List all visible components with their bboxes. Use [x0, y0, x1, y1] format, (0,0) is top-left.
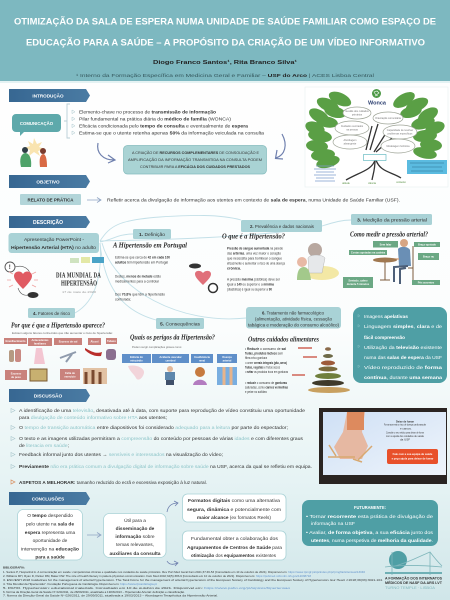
heading: Introdução: INTRODUÇÃO [32, 92, 64, 98]
risk labels: Envelhecimento [6, 339, 26, 343]
title: OTIMIZAÇÃO DA SALA DE ESPERA NUMA UNIDADE DE SAÚDE FAMILIAR COMO ESPAÇO DE [14, 16, 436, 26]
consequence labels: renal [199, 358, 205, 362]
bibliography: 7. Norma da Direção-Geral da Saúde Nº 026/2011, de 29/09/2011, atualizada a 19/03/2013 – Abordagem Terapêutica da Hipertensão Arterial. [3, 594, 218, 598]
section 5 subtitle: Podem surgir complicações graves como: [132, 345, 182, 349]
callout: complementary resources: AMPLIFICAÇÃO DA INFORMAÇÃO TRANSMITIDA NA CONSULTA PODEM [128, 157, 262, 162]
bibliography: 4. "Dia Mundial da Hipertensão". Fundação Portuguesa de Cardiologia. Disponível em: https://www.fpcardiologia.pt [3, 583, 157, 586]
box: dissemination: Útil para a [124, 517, 146, 524]
header band [0, 0, 450, 83]
box: waiting time conclusion: intervenção na educação [21, 546, 79, 552]
box: 6. Tratamento não farmacológico: (alimentação, atividade física, cessação [255, 316, 332, 322]
section 4 subtitle: Existem alguns fatores conhecidos que irão aumentar o risco de hipertensão: [12, 331, 113, 335]
panel: future work: FUTURAMENTE: [354, 505, 387, 510]
panel: video features [353, 307, 447, 383]
icon: WONCA logo: Wonca [368, 100, 386, 106]
box: collaboration: Agrupamentos de Centros de Saúde para [187, 545, 282, 551]
heading: Introdução [9, 89, 90, 102]
television: message text [384, 420, 426, 442]
mind-map connectors [75, 215, 351, 320]
tree ellipses [333, 107, 417, 153]
tree ellipses: abrangente [344, 142, 357, 146]
tree root labels [342, 181, 406, 185]
introduction bullet list: Pilar fundamental na prática diária do médico de família (WONCA) [79, 116, 232, 122]
box: collaboration: otimização dos equipamentos existentes [191, 553, 277, 559]
arrow: curved down [167, 561, 178, 566]
objective text: Refletir acerca da divulgação de informação aos utentes em contexto de sala de espera , numa Unidade de Saúde Familiar (USF). [107, 198, 400, 202]
callout: complementary resources: A CRIAÇÃO DE RECURSOS COMPLEMENTARES DE CONSOLIDAÇÃO E [132, 150, 260, 155]
figure: food pyramid [308, 347, 350, 393]
box: 3. Medição [351, 214, 432, 225]
heading: dangers of hypertension: Quais os perigos da Hipertensão? [130, 334, 215, 342]
risk labels: de peso [11, 375, 21, 379]
arrow: curved right [276, 134, 285, 159]
risk labels: familiares [34, 342, 47, 346]
tree root labels: atitude [342, 182, 350, 185]
risk labels: Falta de [65, 371, 75, 375]
panel: video features: numa das salas de espera da USF [364, 355, 442, 361]
box: dissemination [104, 514, 166, 558]
logo: internato bridge: A FORMAÇÃO DOS INTERNATOS [385, 576, 443, 580]
section 4 content [4, 322, 117, 384]
bibliography: 3. ESC/ESH 2018 Guidelines for the management of arterial hypertension. The Task Force for the management of arterial hypertension of the European Society of Cardiology and the European Society of Hypertension. Eur Heart J 2018;39(33):3021-104. [3, 579, 383, 582]
box: 3. Medição: 3. Medição da pressão arterial [357, 218, 427, 224]
bibliography: BIBLIOGRAFIA: [3, 566, 25, 570]
section 6 text: e peixe no sal/óleo [245, 390, 267, 394]
box: waiting time conclusion [18, 510, 82, 560]
section 6 text: fibra e/ou gordura [245, 356, 267, 360]
heading: how to measure: Como medir a pressão arterial? [350, 230, 428, 238]
label: relato de prática [20, 194, 81, 205]
television: message text: com a ajuda dos cuidados de saúde [386, 434, 424, 438]
discussion bullet list: O texto e as imagens utilizadas permitiram a compreensão do conteúdo por pessoas de várias idades e com diferentes graus [19, 436, 304, 441]
panel: video features: Vídeo reproduzido de forma [364, 365, 442, 371]
box: waiting time conclusion: oportunidade de [33, 538, 68, 544]
box: digital formats [182, 494, 286, 522]
section 6 text: frutas, produtos lácteos sem [245, 352, 283, 356]
tree ellipses: Abordagem [344, 139, 356, 142]
box: dissemination: disseminação de [116, 526, 155, 532]
box: collaboration [182, 531, 286, 560]
icon: heart and monitor [189, 264, 218, 292]
heading: what is hypertension: O que é a Hipertensão? [222, 232, 285, 240]
bibliography: 2. Williams MH, Ryan D, Parker RM, Baker DW. The role of health literacy in patient-physician communication. Fam Med 2002;34(5):383-9 [Consultado em 10 de outubro de 2021]. Disponível em: https://pubmed.ncbi.nlm.nih.gov/12038718 [3, 575, 312, 578]
panel: video features: contínua , durante uma semana [364, 375, 442, 381]
risk labels: Excesso de sal [59, 340, 78, 344]
tree ellipses: Cuidados centrados [341, 125, 364, 128]
tree ellipses: Orientação comunitária [375, 117, 402, 120]
section 6 text: frutas, vegetais e frutos secos [245, 366, 280, 370]
consequence icons [128, 365, 237, 385]
heading: Descrição: DESCRIÇÃO [33, 219, 63, 226]
section 6 text: • comer cereais integrais (pão, arroz) [245, 361, 287, 365]
panel: future work: • Avaliar, de forma objetiva , a sua eficácia junto dos [306, 530, 434, 535]
arrow: curved left [98, 143, 115, 163]
logo: internato bridge [385, 551, 443, 590]
heading: world hypertension day: DIA MUNDIAL DA [56, 272, 101, 280]
panel: video features: fácil compreensão [364, 335, 405, 341]
section 6 content [245, 336, 350, 394]
measurement labels: Sem falar [380, 242, 391, 246]
tree trunk and roots [346, 124, 401, 180]
discussion bullet list: para divulgação de conteúdo informativo sobre HTA aos utentes; [19, 415, 167, 420]
box: 2. Prevalência [241, 220, 322, 232]
section 1 text: Destes, menos de metade estão [115, 274, 161, 278]
risk labels [4, 338, 117, 380]
measurement labels: Braço nu [423, 254, 435, 258]
box: 6. Tratamento não farmacológico: tabágica e moderação do consumo alcoólico) [248, 322, 339, 328]
box: 6. Tratamento não farmacológico: 6. Tratamento não farmacológico [262, 310, 324, 316]
television: arm and fist [328, 412, 372, 462]
section 6 text: • reduzir o consumo de gorduras [245, 381, 287, 385]
arrow: conclusions [87, 532, 101, 538]
panel: video features: Linguagem simples , clara e de [364, 324, 442, 330]
icon: doctor examining patient [297, 243, 339, 280]
discussion bullet list: Previamente não era prática comum a divulgação digital de informação sobre saúde na USF, acerca da qual se refletiu em equipa. [19, 464, 312, 469]
bibliography [3, 566, 383, 598]
section 6 text: • Reduzir o consumo de sal [245, 347, 286, 351]
measurement labels: Costas apoiadas na cadeira [351, 250, 386, 254]
box: collaboration: Fundamental obter a colaboração dos [191, 536, 279, 542]
risk labels: Tabaco [107, 339, 116, 343]
discussion bullet list: Feedback informal junto dos utentes → sensíveis e interessados na visualização do vídeo; [19, 452, 223, 457]
risk labels: Álcool [91, 338, 99, 344]
bibliography: 6. Norma da Direção-Geral da Saúde Nº 020/2011, de 28/09/2011, atualizada a 19/03/2013 – Hipertensão Arterial: definição e classificação. [3, 590, 185, 594]
box: waiting time conclusion: espera representa uma [25, 530, 76, 536]
bibliography: 5. PAHO. Hypertension: educational materials. Consultado em 10 de outubro de 2021. Disponível em: https://www.paho.org/pt/topicos/hipertensao [3, 587, 291, 590]
tree ellipses: Gestão dos cuidados [345, 110, 369, 113]
tree root labels: contexto [396, 181, 406, 184]
tree side caption [314, 166, 336, 181]
introduction bullet list: Estima-se que o utente retenha apenas 50% da informação veiculada na consulta [79, 130, 265, 136]
panel: future work: • Tornar recorrente esta prática de divulgação de [306, 514, 434, 519]
section 1 text: medicamentos para a controlar [115, 280, 160, 284]
television: red callout: Fale com a sua equipa de saúde [393, 452, 433, 456]
television: message text: Consulte o seu médico para deixar de fumar [386, 430, 424, 434]
tree blue box [407, 160, 447, 174]
discussion bullet list: A identificação de uma televisão , desativada até à data, com suporte para reprodução de vídeo constituiu uma oportunidade [19, 408, 305, 413]
tree ellipses: primários [352, 114, 363, 116]
section 2 text: crónica. [227, 266, 241, 270]
box: dissemination: temas relevantes, [116, 542, 154, 548]
television: message text: e cancro. [400, 426, 412, 430]
section 1 content [112, 242, 218, 302]
heading: Objetivo [9, 175, 90, 188]
figure: television with video [319, 408, 447, 484]
box: PowerPoint presentation [8, 233, 99, 253]
title: EDUCAÇÃO PARA A SAÚDE – A PROPÓSITO DA CRIAÇÃO DE UM VÍDEO INFORMATIVO [26, 36, 425, 48]
heading: Objetivo: OBJETIVO [36, 180, 60, 184]
section 2 text: que necessita para bombear o sangue [227, 256, 282, 260]
logo: internato bridge: MÉDICOS DE NASF DA ARS LVT [385, 580, 443, 585]
measurement labels: Sentado, calmo [348, 278, 368, 282]
consequence labels: Enfarte do [130, 355, 143, 359]
section 2 text: A pressão máxima (sistólica) deve ser [227, 278, 281, 282]
label: relato de prática: RELATO DE PRÁTICA [28, 198, 74, 202]
section 1 text: adultos têm hipertensão em Portugal [115, 260, 168, 264]
measurement labels: durante 5 minutos [347, 282, 370, 286]
box: dissemination: auxiliares da consulta [110, 551, 161, 557]
panel: video features: Imagens apelativas [364, 314, 408, 320]
measurement labels [343, 241, 440, 288]
television: message text: da USF [400, 438, 410, 442]
section 1 text: Estima-se que cerca de 42 em cada 100 [115, 256, 170, 260]
box: 4. Fatores de risco [28, 308, 75, 318]
heading: hypertension in Portugal: A Hipertensão em Portugal [112, 242, 187, 250]
box: dissemination: informação sobre [115, 534, 155, 540]
callout: comunicação: COMUNICAÇÃO [20, 121, 54, 126]
icon: two people talking [20, 138, 47, 167]
section 6 text: • evitar os produtos ricos em gorduras [245, 370, 288, 374]
box: waiting time conclusion: para a saúde [35, 554, 65, 560]
consequence labels [122, 354, 237, 363]
heading: world hypertension day: 17 de maio de 2020 [62, 290, 96, 294]
title [14, 16, 436, 48]
section 3 content [343, 230, 440, 288]
section 2 text [227, 246, 285, 292]
section 1 text: controlada; [115, 298, 131, 302]
tree leaves right [391, 89, 446, 161]
television: message text: Deixe de fumar [396, 420, 415, 424]
section 1 text: Dos 70,8% que têm a hipertensão [115, 292, 165, 296]
discussion: points to improve: ASPETOS A MELHORAR: tamanho reduzido do ecrã e excessiva exposição à luz natural. [19, 480, 207, 485]
heading: Discussão [9, 389, 90, 402]
box: PowerPoint presentation: Hipertensão Arterial (HTA) no adulto [11, 245, 96, 251]
heading: Conclusões [9, 492, 90, 505]
television: red callout: e peça ajuda para deixar de fumar [392, 456, 433, 460]
panel: future work [302, 500, 438, 546]
consequence labels: Acidente vascular [159, 355, 182, 359]
consequence labels: miocárdio [130, 358, 143, 362]
affiliation: ¹ Interno da Formação Específica em Medicina Geral e Familiar – USF do Arco | ACES Lisboa Central [76, 73, 374, 78]
consequence labels: arterial [223, 358, 232, 362]
figure: WONCA tree [304, 87, 448, 187]
tree ellipses: Capacidade de resolver [387, 129, 413, 132]
section 5 content [122, 334, 237, 385]
panel: future work: utentes , numa perspetiva de melhoria da qualidade . [311, 538, 433, 543]
section 6 text [245, 347, 288, 394]
introduction bullet list [72, 110, 265, 136]
box: waiting time conclusion: O tempo despendido [27, 513, 73, 519]
heading: Descrição [9, 216, 90, 228]
heading: world hypertension day [56, 272, 101, 294]
section 2 text: igual a 140 ou superior e a mínima [227, 282, 274, 286]
box: 1. Definição: 1. Definição [139, 232, 165, 238]
bracket [64, 104, 70, 138]
consequence labels: Insuficiência [194, 355, 210, 359]
icon: heart with blood pressure cuff: ! [9, 265, 11, 271]
icon: heart with blood pressure cuff [5, 262, 38, 298]
television: red callout [387, 449, 438, 464]
tree leaves left [304, 88, 353, 170]
tree root labels: ciência [368, 182, 376, 185]
section 2 text: (diastólica) é igual ou superior a 90 [227, 288, 272, 292]
section 2 text: das artérias, uma vez maior o coração [227, 252, 281, 256]
section 2 text: eficazmente e aumentar o risco de uma doença [227, 262, 285, 266]
tree base box [364, 154, 386, 160]
tree ellipses: Modelagem holística [387, 145, 410, 148]
section 2 text: Pressão de sangue aumentada na parede [227, 246, 283, 250]
heading: why hypertension appears: Por que é que a Hipertensão aparece? [11, 322, 105, 330]
box: 1. Definição [133, 229, 171, 239]
risk icons [9, 348, 116, 384]
box: digital formats: Formatos digitais como uma alternativa [188, 498, 280, 504]
box: 5. Consequências [156, 318, 204, 329]
authors: Diogo Franco Santos¹, Rita Branco Silva¹ [153, 59, 297, 66]
introduction bullet list: Elemento-chave no processo de transmissão de informação [79, 110, 216, 114]
box: 6. Tratamento não farmacológico [246, 307, 341, 328]
logo: internato bridge: TURNO TEMPLE · LISBOA [385, 586, 436, 590]
section 2 content [222, 232, 339, 292]
icon: partner logos [70, 257, 104, 263]
bibliography: 1. Santos P, Hespanhol A. A comunicação em saúde: competências clínicas e qualidade nos cuidados de saúde primários. Rev Port Med Geral Fam 2021;37:46-53 [Consultado em 10 de outubro de 2021]. Disponível em: https://www.rpmgf.pt/ojs/index.php/rpmgf/article/view/13046 [3, 571, 366, 574]
callout: complementary resources [124, 146, 266, 174]
heading: Conclusões: CONCLUSÕES [32, 496, 64, 502]
box: 4. Fatores de risco: 4. Fatores de risco [33, 311, 70, 317]
box: PowerPoint presentation: Apresentação PowerPoint - [24, 237, 84, 243]
icon: WONCA logo [368, 89, 386, 106]
discussion bullet list: O tempo de transição automática entre diapositivos foi considerado adequado para a leitura por parte do espectador; [19, 425, 288, 430]
panel: video features: Utilização da televisão existente [364, 345, 442, 351]
discussion bullet list [11, 408, 312, 469]
consequence labels: Doença [222, 355, 232, 359]
panel: future work: informação na USF [311, 521, 355, 526]
box: 5. Consequências: 5. Consequências [160, 322, 201, 328]
section 1 text [115, 256, 170, 302]
figure: seated man [373, 239, 413, 284]
arrow: curved up [167, 501, 178, 512]
pyramid labels [292, 347, 317, 376]
risk labels: exercício [64, 374, 76, 378]
heading: world hypertension day: HIPERTENSÃO [61, 280, 97, 288]
risk labels: Antecedentes [31, 338, 49, 342]
box: digital formats: maior alcance (ex formatos Reels) [197, 515, 271, 521]
introduction bullet list: Eficácia condicionada pelo tempo de consulta e eventualmente de espera [79, 124, 249, 128]
callout: complementary resources: CONTRIBUIR PARA A EFICÁCIA DOS CUIDADOS PRESTADOS [140, 164, 251, 169]
heading: other food care: Outros cuidados alimentares [248, 336, 319, 344]
box: waiting time conclusion: pelo utente na sala de [26, 522, 74, 528]
risk labels: Excesso [11, 372, 22, 376]
discussion bullet list: de literacia em saúde ; [19, 443, 69, 448]
tree ellipses: problemas específicos [388, 132, 413, 136]
section 6 text: saturadas, como carnes vermelhas [245, 386, 288, 390]
tree ellipses: na pessoa [346, 128, 358, 132]
consequence labels: cerebral [165, 358, 176, 362]
arrow: objective [87, 198, 101, 202]
television: message text: Fumar aumenta o risco de doença cardiovascular [384, 422, 426, 426]
box: 2. Prevalência: 2. Prevalência e dados nacionais [250, 224, 315, 230]
heading: Discussão: DISCUSSÃO [34, 392, 63, 400]
measurement labels: Pés assentes [418, 280, 435, 284]
box: digital formats: segura, dinâmica e potencialmente com [187, 507, 281, 513]
callout: comunicação [12, 114, 61, 136]
measurement labels: Braço apoiado [418, 242, 436, 246]
